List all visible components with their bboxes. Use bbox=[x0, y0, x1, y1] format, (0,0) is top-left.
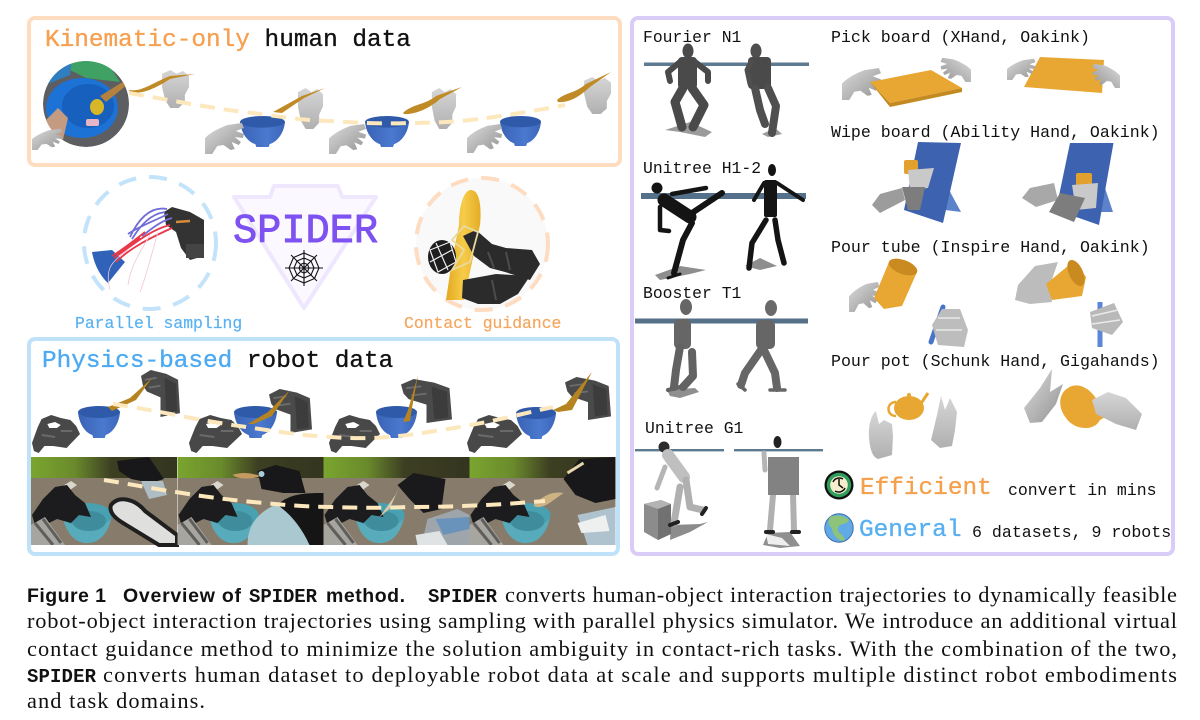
task: Wipe board right bbox=[1022, 143, 1114, 225]
robot: Unitree H1-2 bbox=[641, 164, 806, 280]
caption line 1: SPIDER bbox=[428, 586, 498, 608]
caption line 5: and task domains. bbox=[27, 688, 205, 713]
label: Pour tube: Pour tube (Inspire Hand, Oakink) bbox=[831, 238, 1150, 257]
task: Pick board left bbox=[842, 58, 971, 107]
photo inset: hand holding blue bowl bbox=[42, 58, 129, 150]
caption line 3: contact guidance method to minimize the solution ambiguity in contact-rich tasks. With the combination of the two, bbox=[27, 636, 1177, 661]
caption line 4: SPIDER bbox=[27, 666, 97, 688]
task: Pick board right bbox=[1007, 57, 1120, 93]
benefit: efficient: Efficient bbox=[860, 475, 992, 502]
benefit: general: General bbox=[859, 517, 961, 544]
panel: robots, tasks, and benefits bbox=[632, 18, 1173, 554]
robot: Booster T1 bbox=[635, 299, 808, 398]
label: contact guidance: Contact guidance bbox=[404, 314, 561, 333]
caption line 1: SPIDER bbox=[249, 586, 318, 608]
kinematic trajectory dashed line bbox=[129, 93, 565, 123]
caption line 2: robot-object interaction trajectories using sampling with parallel physics simulator. We introduce an additional virtual bbox=[27, 608, 1177, 633]
figure kicking bbox=[652, 182, 722, 278]
benefit detail: datasets and robots: 6 datasets, 9 robots bbox=[972, 523, 1171, 542]
benefit detail: convert in mins: convert in mins bbox=[1008, 481, 1157, 500]
label: Pick board: Pick board (XHand, Oakink) bbox=[831, 28, 1090, 47]
kinematic frame 4: bowl, hand, spoon bbox=[467, 72, 611, 153]
task: Pour tube right bbox=[1015, 257, 1123, 347]
photo frame 4 bbox=[470, 457, 616, 545]
contact ball with virtual web bbox=[428, 226, 478, 274]
photo frame 3 bbox=[324, 457, 470, 545]
label: Pour pot: Pour pot (Schunk Hand, Gigahands) bbox=[831, 352, 1160, 371]
task: Wipe board left bbox=[872, 142, 961, 223]
robot: Fourier N1 bbox=[644, 44, 809, 137]
kinematic frame 3: bowl, hand, spoon bbox=[329, 87, 462, 154]
bowl slice bbox=[92, 250, 125, 283]
photo frame 2 bbox=[178, 457, 324, 545]
SPIDER logo bbox=[233, 186, 378, 308]
label: parallel sampling: Parallel sampling bbox=[75, 314, 242, 333]
task: Pour pot right bbox=[1024, 369, 1142, 430]
figure carrying box bbox=[763, 436, 800, 548]
simulation frame 3 bbox=[329, 375, 452, 453]
caption line 1: Overview of bbox=[123, 585, 242, 607]
figure caption bbox=[27, 582, 1177, 713]
SPIDER wordmark: SPIDER bbox=[233, 209, 378, 255]
figure climbing on box bbox=[644, 442, 708, 540]
caption line 4: converts human dataset to deployable robot data at scale and supports multiple distinct robot embodiments bbox=[103, 662, 1177, 687]
simulation frame 4 bbox=[467, 372, 611, 453]
contact guidance circle bbox=[416, 178, 548, 310]
label: Unitree H1-2: Unitree H1-2 bbox=[643, 159, 761, 178]
heading: kinematic-only human data: Kinematic-only human data bbox=[45, 27, 411, 54]
label: Booster T1: Booster T1 bbox=[643, 284, 742, 303]
kinematic frame 2: bowl, hand, spoon bbox=[205, 88, 325, 154]
task: Pour pot left bbox=[869, 393, 957, 459]
parallel sampling circle bbox=[84, 177, 216, 309]
simulation frame 1 bbox=[32, 370, 180, 453]
icon: spider web bbox=[285, 250, 323, 286]
label: Unitree G1: Unitree G1 bbox=[645, 419, 744, 438]
robot: Unitree G1 bbox=[635, 436, 823, 548]
panel: kinematic-only human data bbox=[29, 18, 620, 165]
yellow object bbox=[446, 190, 481, 300]
real-robot photo strip bbox=[31, 457, 616, 545]
ground shadows bbox=[655, 258, 777, 280]
simulation frame 2 bbox=[189, 389, 312, 453]
robot fingers bbox=[462, 230, 540, 304]
ground shadows bbox=[665, 122, 782, 137]
figure right bbox=[738, 300, 785, 390]
figure left bbox=[668, 44, 708, 127]
heading: physics-based robot data: Physics-based robot data bbox=[42, 348, 393, 375]
label: Fourier N1: Fourier N1 bbox=[643, 28, 742, 47]
caption line 1: Figure 1 bbox=[27, 585, 106, 607]
ground shadows bbox=[667, 388, 699, 398]
hand mesh beside inset bbox=[32, 129, 62, 150]
caption line 1 bbox=[27, 582, 1177, 608]
photo frame 1 bbox=[31, 457, 177, 545]
robot hand in sampling view bbox=[164, 207, 204, 260]
icon: clock efficiency bbox=[824, 470, 854, 500]
caption line 1: converts human-object interaction trajectories to dynamically feasible bbox=[505, 582, 1177, 607]
simulation trajectory dashed line bbox=[113, 404, 553, 438]
sampled trajectories bbox=[108, 209, 172, 292]
kinematic frame 1: spoon and hand bbox=[129, 70, 195, 108]
figure left bbox=[668, 299, 693, 390]
inverted triangle badge bbox=[234, 186, 376, 308]
label: Wipe board: Wipe board (Ability Hand, Oakink) bbox=[831, 123, 1160, 142]
panel: physics-based robot data bbox=[29, 339, 618, 554]
icon: globe bbox=[825, 514, 853, 542]
real-robot trajectory dashed line bbox=[104, 480, 545, 508]
figure standing bbox=[749, 164, 803, 268]
task: Pour tube left bbox=[849, 255, 968, 347]
caption line 1: method. bbox=[326, 585, 405, 607]
figure right bbox=[747, 44, 776, 133]
